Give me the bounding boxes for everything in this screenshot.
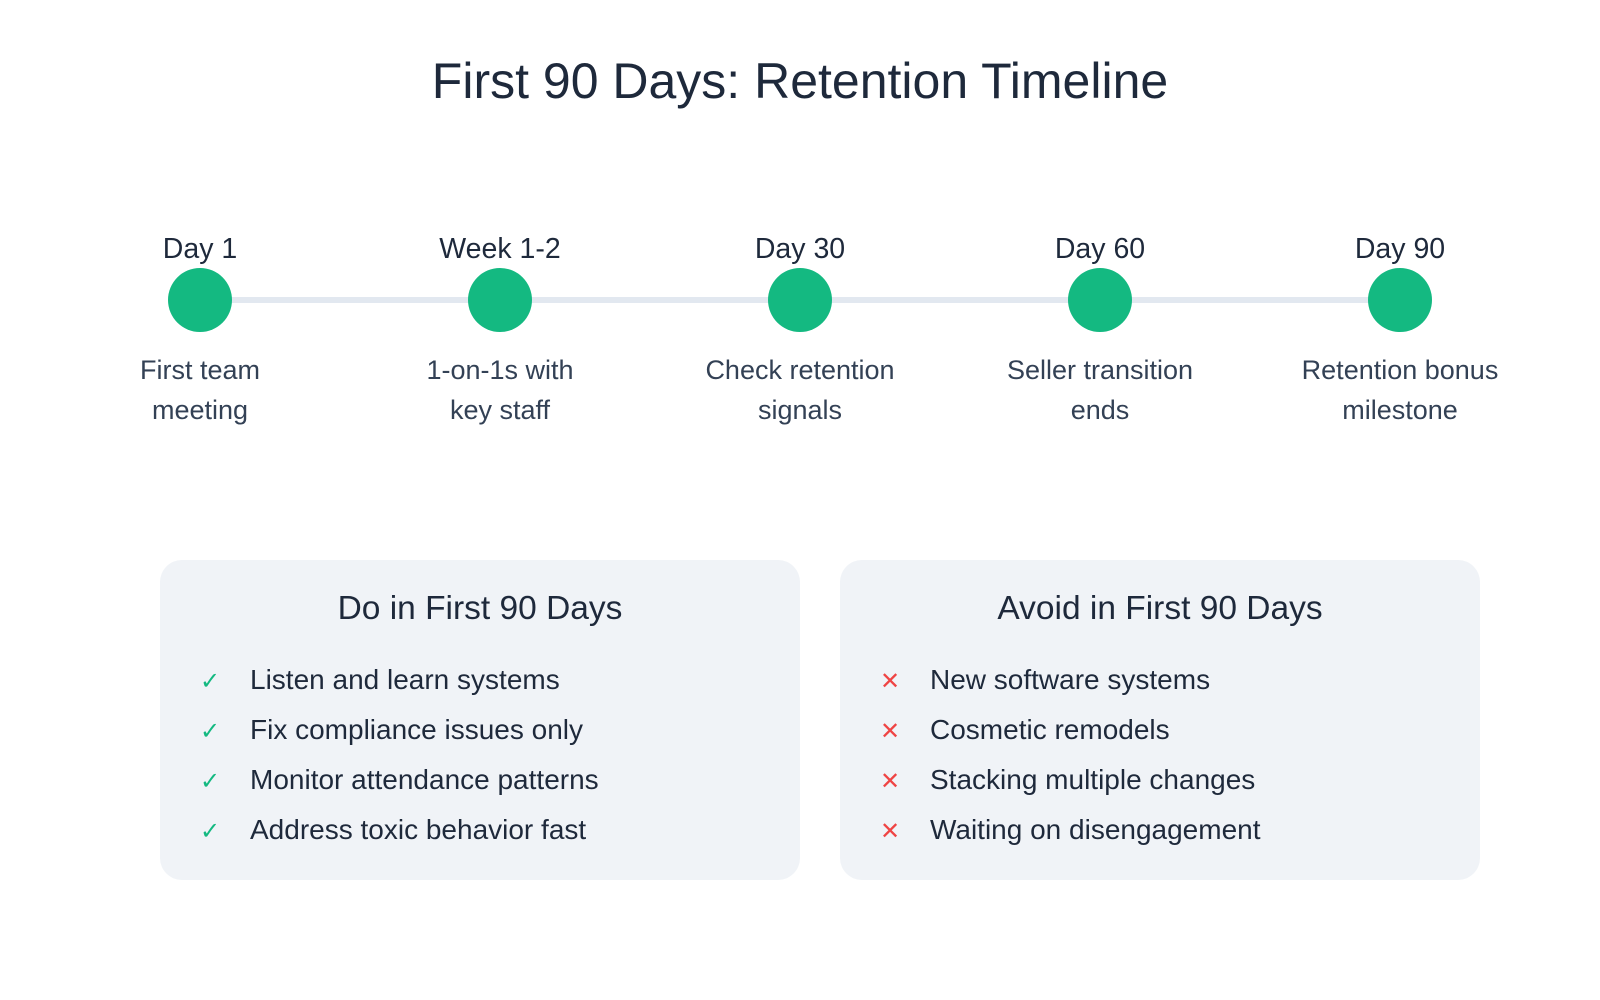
panel: do: Fix compliance issues only <box>250 714 583 745</box>
milestone: Day 30 <box>705 233 895 425</box>
milestone: Day 60: ends <box>1071 395 1129 425</box>
milestone: Day 60: Seller transition <box>1007 355 1193 385</box>
panel: avoid: Waiting on disengagement <box>930 814 1261 845</box>
panel: avoid: New software systems <box>930 664 1210 695</box>
panel: do: Monitor attendance patterns <box>250 764 599 795</box>
milestone: Week 1-2: key staff <box>450 395 550 425</box>
panel: avoid: Avoid in First 90 Days <box>997 590 1323 627</box>
panel: avoid: Cosmetic remodels <box>930 714 1170 745</box>
milestone: Day 90 <box>1302 233 1498 425</box>
panel: do: Do in First 90 Days <box>338 590 622 627</box>
milestone: Day 30: signals <box>758 395 842 425</box>
panel: do: ✓ <box>200 768 220 795</box>
milestone: Day 60: Day 60 <box>1055 233 1145 265</box>
panel: avoid: Stacking multiple changes <box>930 764 1255 795</box>
panel: avoid: ✕ <box>880 768 900 795</box>
panel: do: Listen and learn systems <box>250 664 560 695</box>
milestone: Day 90: Retention bonus <box>1302 355 1498 385</box>
milestone: Week 1-2: 1-on-1s with <box>426 355 574 385</box>
milestone: Day 1: meeting <box>152 395 248 425</box>
panel: do: ✓ <box>200 818 220 845</box>
milestone: Day 30: Day 30 <box>755 233 845 265</box>
milestone: Day 90: Day 90 <box>1355 233 1445 265</box>
panel: do: Address toxic behavior fast <box>250 814 586 845</box>
panel: do: ✓ <box>200 668 220 695</box>
milestone: Day 60 <box>1007 233 1193 425</box>
milestone: Week 1-2: Week 1-2 <box>439 233 561 265</box>
panel: avoid <box>840 560 1480 880</box>
milestone: Day 1: First team <box>140 355 260 385</box>
panel: avoid: ✕ <box>880 668 900 695</box>
milestone: Day 1: Day 1 <box>163 233 237 265</box>
milestone: Day 90: milestone <box>1342 395 1458 425</box>
panel: do: ✓ <box>200 718 220 745</box>
milestone: Day 30: Check retention <box>705 355 895 385</box>
panel: avoid: ✕ <box>880 818 900 845</box>
panel: avoid: ✕ <box>880 718 900 745</box>
milestone: Day 1 <box>140 233 260 425</box>
panel: do <box>160 560 800 880</box>
timeline line <box>200 297 1400 303</box>
title: First 90 Days: Retention Timeline <box>432 53 1168 109</box>
milestone: Week 1-2 <box>426 233 574 425</box>
